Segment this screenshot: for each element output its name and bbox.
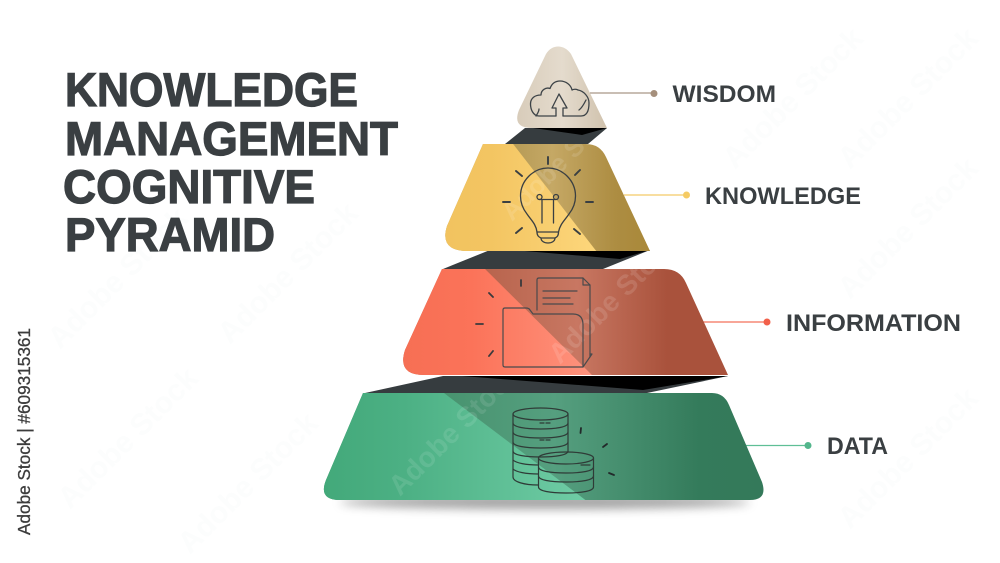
title [63, 63, 398, 261]
icon: light bulb [503, 157, 593, 243]
tier: knowledge [445, 144, 650, 251]
watermark on knowledge tier: Adobe Stock [495, 92, 629, 226]
watermark pattern: Adobe Stock [832, 152, 985, 305]
connector: information [703, 318, 770, 326]
label: wisdom: WISDOM [672, 81, 776, 108]
watermark on data tier: Adobe Stock [382, 358, 526, 501]
title: COGNITIVE [63, 160, 315, 213]
label: information: INFORMATION [786, 310, 961, 337]
connector: knowledge [624, 192, 690, 198]
watermark pattern: Adobe Stock [717, 22, 870, 175]
watermark pattern: Adobe Stock [832, 382, 985, 535]
connector: wisdom [590, 90, 658, 97]
stock credit: Adobe Stock | #609315361 [14, 328, 34, 535]
tier: data [324, 393, 764, 500]
title: MANAGEMENT [65, 112, 398, 165]
pyramid connector bands [365, 128, 728, 393]
icon: database stacks [513, 408, 614, 493]
title: PYRAMID [65, 208, 275, 261]
tier: information [403, 269, 728, 375]
base shadow [340, 495, 750, 509]
watermark pattern: Adobe Stock [52, 362, 205, 515]
connector: data [745, 442, 812, 449]
tier: wisdom [517, 46, 607, 128]
label: data: DATA [827, 433, 888, 460]
label: knowledge: KNOWLEDGE [705, 183, 861, 210]
icon: folder and document [476, 278, 592, 367]
icon: cloud with up arrow [530, 81, 589, 116]
watermark on information tier: Adobe Stock [542, 226, 686, 369]
title: KNOWLEDGE [65, 63, 358, 116]
watermark pattern: Adobe Stock [832, 22, 985, 175]
watermark pattern: Adobe Stock [172, 407, 325, 560]
watermark pattern: Adobe Stock [42, 202, 195, 355]
watermark pattern: Adobe Stock [212, 197, 365, 350]
